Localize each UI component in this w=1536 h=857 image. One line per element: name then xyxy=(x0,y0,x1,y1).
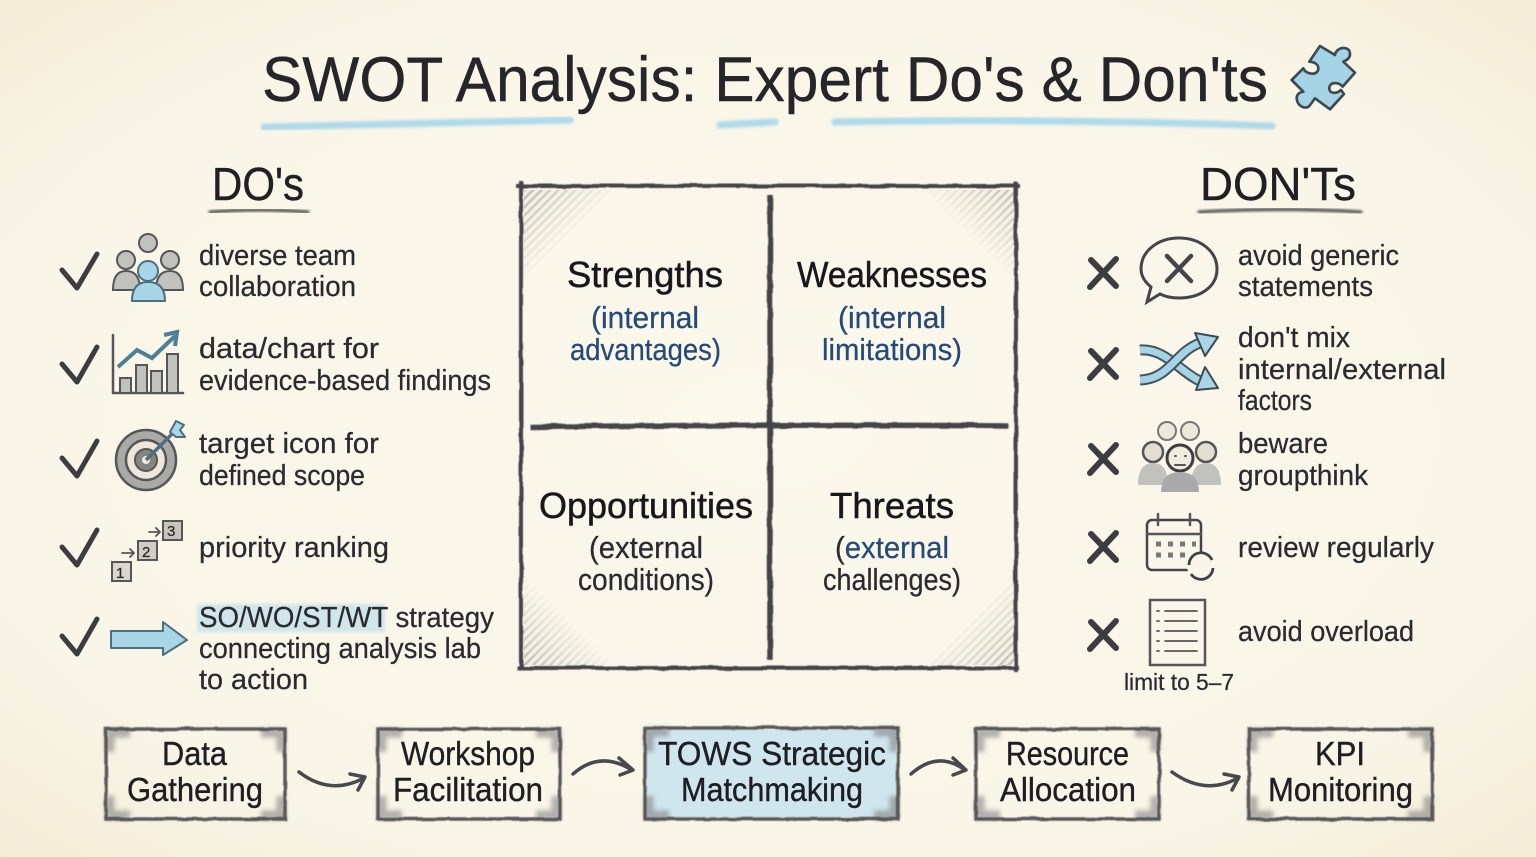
step: TOWS strategic matchmaking: TOWS Strategic xyxy=(658,735,886,772)
item: strategy: connecting analysis lab xyxy=(199,633,481,665)
item: don't mix: factors xyxy=(1238,385,1312,417)
step: KPI monitoring: Monitoring xyxy=(1268,771,1413,808)
quadrant: opportunities: Opportunities xyxy=(539,485,753,526)
arrow xyxy=(573,758,633,775)
step: resource allocation: Resource xyxy=(1006,735,1129,772)
quadrant: weaknesses: Weaknesses xyxy=(797,254,987,295)
item: avoid overload: limit to 5–7 xyxy=(1124,669,1234,695)
item: priority ranking: 2 xyxy=(142,544,150,561)
item: strategy: SO/WO/ST/WT strategy xyxy=(199,602,494,634)
quadrant: opportunities: conditions) xyxy=(578,562,714,597)
step: TOWS strategic matchmaking: Matchmaking xyxy=(681,771,863,808)
step: workshop facilitation xyxy=(378,729,560,819)
panel: SWOT matrix xyxy=(516,181,1020,672)
quadrant: weaknesses: limitations) xyxy=(822,332,962,367)
quadrant: threats xyxy=(823,485,961,597)
step: data gathering: Data xyxy=(162,735,228,772)
arrow xyxy=(911,758,966,775)
quadrant: opportunities xyxy=(539,485,753,597)
heading: DON'Ts: DON'Ts xyxy=(1200,158,1356,210)
item: priority ranking: 1 xyxy=(116,565,124,582)
item: strategy xyxy=(62,602,494,696)
step: data gathering xyxy=(106,729,285,819)
item: target: defined scope xyxy=(199,460,365,492)
step: workshop facilitation: Facilitation xyxy=(393,771,543,808)
quadrant: threats: Threats xyxy=(830,485,954,526)
arrow xyxy=(299,772,365,790)
item: diverse team collaboration xyxy=(62,234,356,303)
item: diverse team collaboration: diverse team xyxy=(199,240,356,272)
item: priority ranking: 3 xyxy=(167,523,175,540)
quadrant: strengths: (internal xyxy=(591,300,699,335)
item: strategy: to action xyxy=(199,664,308,696)
quadrant: threats: challenges) xyxy=(823,562,961,597)
item: review regularly: review regularly xyxy=(1238,532,1434,564)
step: resource allocation: Allocation xyxy=(1000,771,1136,808)
item: avoid generic statements: avoid generic xyxy=(1238,240,1399,272)
process flow xyxy=(106,728,1432,819)
item: data chart: evidence-based findings xyxy=(199,365,491,397)
step: KPI monitoring xyxy=(1249,729,1432,819)
item: avoid overload: avoid overload xyxy=(1238,616,1414,648)
item: data chart xyxy=(62,332,491,397)
item: target xyxy=(62,421,379,492)
quadrant: strengths xyxy=(567,254,723,367)
quadrant: opportunities: (external xyxy=(589,530,703,565)
step: resource allocation xyxy=(976,729,1159,819)
quadrant: strengths: Strengths xyxy=(567,254,723,295)
item: beware groupthink xyxy=(1090,422,1368,492)
quadrant: strengths: advantages) xyxy=(570,332,721,367)
item: beware groupthink: beware xyxy=(1238,428,1328,460)
step: KPI monitoring: KPI xyxy=(1315,735,1365,772)
panel: don'ts list xyxy=(1090,238,1446,695)
quadrant: threats: (external xyxy=(835,530,949,565)
icon: puzzle piece xyxy=(1292,46,1355,109)
icon: blue arrow xyxy=(111,622,187,655)
step: workshop facilitation: Workshop xyxy=(401,735,535,772)
item: priority ranking xyxy=(62,521,389,582)
item: priority ranking: priority ranking xyxy=(199,532,389,564)
item: don't mix xyxy=(1090,322,1446,417)
heading: DO's: DO's xyxy=(212,158,304,210)
item: data chart: data/chart for xyxy=(199,333,379,365)
item: target: target icon for xyxy=(199,428,379,460)
item: avoid overload xyxy=(1090,600,1414,695)
quadrant: weaknesses xyxy=(797,254,987,367)
item: avoid generic statements xyxy=(1090,238,1399,303)
item: don't mix: don't mix xyxy=(1238,322,1350,354)
step: data gathering: Gathering xyxy=(127,771,263,808)
step: TOWS strategic matchmaking xyxy=(645,728,898,819)
panel: do's list xyxy=(62,234,494,696)
item: diverse team collaboration: collaboration xyxy=(199,271,356,303)
item: avoid generic statements: statements xyxy=(1238,271,1373,303)
arrow xyxy=(1172,772,1239,790)
item: don't mix: internal/external xyxy=(1238,354,1446,386)
title: SWOT Analysis: Expert Do's & Don'ts xyxy=(262,45,1268,115)
item: review regularly xyxy=(1090,514,1434,580)
quadrant: weaknesses: (internal xyxy=(838,300,946,335)
item: beware groupthink: groupthink xyxy=(1238,460,1368,492)
